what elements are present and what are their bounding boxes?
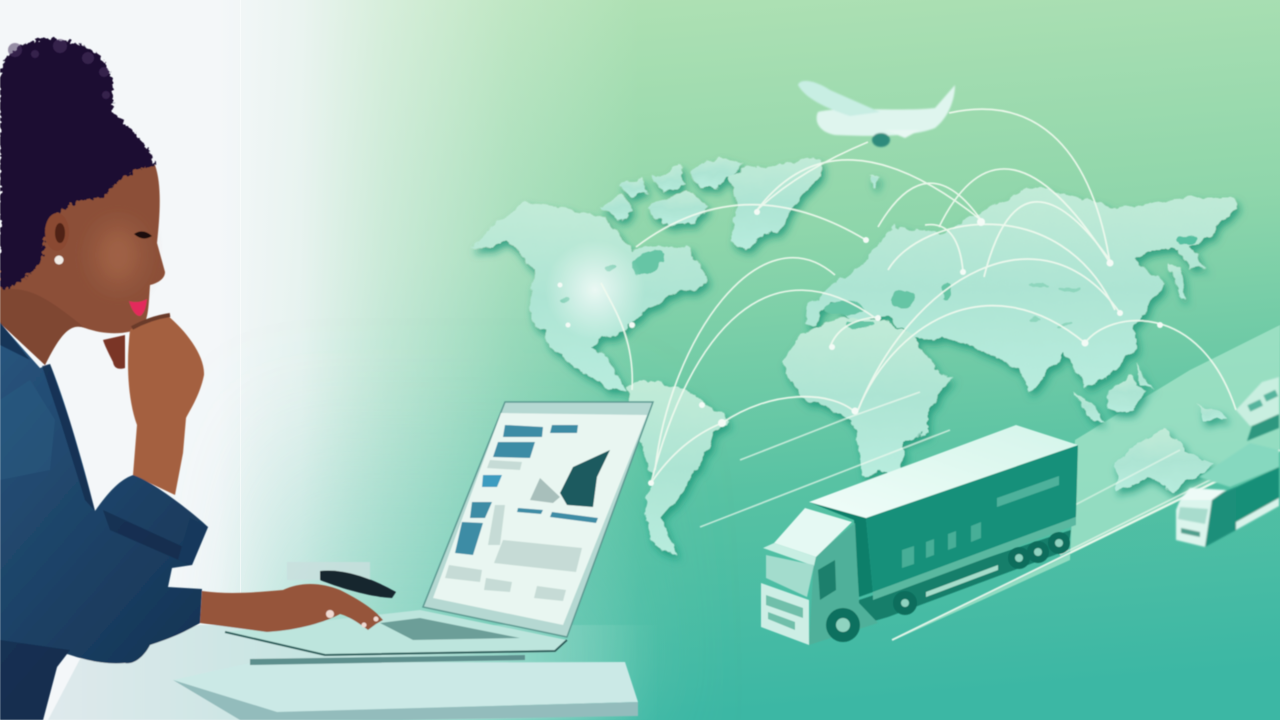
truck cab side [809, 523, 878, 645]
glass on desk [287, 562, 370, 580]
typing forearm [200, 584, 383, 632]
continent: Eurasia [806, 187, 1236, 390]
laptop screen [433, 413, 647, 625]
jacket cuff [178, 518, 208, 565]
ear [45, 213, 69, 251]
small truck cab front [1176, 500, 1212, 547]
ship cargo stack [1236, 377, 1279, 426]
truck windshield [766, 555, 814, 597]
truck undercarriage [850, 530, 1071, 628]
hair [0, 39, 155, 290]
fingernails [326, 610, 378, 628]
neck and face [0, 165, 165, 365]
truck wheels [893, 532, 1070, 615]
truck front grille [761, 583, 809, 645]
continent: North America [470, 203, 707, 390]
small truck side [1230, 467, 1279, 530]
screen text lines [445, 460, 582, 601]
small truck roof [1199, 443, 1279, 487]
truck cab top band [763, 543, 816, 566]
truck side step [926, 565, 998, 597]
continent: Greenland [727, 157, 823, 250]
islands: Arctic archipelago [600, 158, 742, 226]
woman [0, 39, 396, 720]
small truck [1176, 443, 1279, 547]
plane wing [798, 81, 880, 116]
earring [54, 256, 64, 264]
ring finger [132, 315, 170, 328]
plane rear wing [885, 130, 920, 138]
eye [134, 231, 152, 239]
paper stack [173, 655, 638, 720]
desk surface [48, 625, 660, 720]
continent: Australia [1116, 430, 1215, 493]
far hand fingers [103, 335, 125, 369]
laptop deck [225, 610, 567, 655]
truck container roof [809, 425, 1078, 518]
islands: Southeast Asia [868, 175, 1225, 420]
truck cab window [818, 560, 836, 600]
truck chassis rail [873, 517, 1076, 600]
small truck grille [1181, 528, 1200, 537]
plane fuselage [817, 85, 955, 136]
airplane [798, 81, 955, 147]
glow over North America [545, 240, 645, 340]
forearm and fist [128, 316, 204, 495]
truck container side [866, 445, 1078, 592]
plane engine [872, 133, 890, 147]
laptop [225, 402, 653, 655]
face highlight [96, 225, 140, 285]
hair puff texture [8, 39, 110, 99]
continent: South America [626, 380, 732, 557]
cargo ship [1236, 377, 1279, 441]
pen [320, 571, 396, 598]
route hubs [558, 209, 1163, 486]
jacket highlight [0, 380, 55, 480]
jacket shadow folds [0, 322, 190, 720]
small truck cab side [1205, 487, 1236, 547]
laptop deck underside edge [225, 632, 567, 655]
ship containers [1247, 390, 1278, 412]
small truck cab roof [1180, 488, 1226, 500]
world map [470, 157, 1236, 557]
truck cab roof [774, 508, 852, 557]
truck front wheel [826, 608, 860, 642]
route arcs [601, 109, 1280, 640]
laptop keyboard [380, 618, 520, 640]
seas cut from map [561, 235, 1196, 329]
continent: Africa [782, 317, 954, 475]
neck shadow [0, 289, 85, 365]
ship hull [1247, 414, 1279, 441]
lips [129, 299, 147, 316]
big truck [761, 425, 1078, 645]
small truck lettering band [1236, 498, 1279, 530]
truck side panel marks [902, 476, 1059, 568]
laptop lid [423, 402, 653, 637]
truck container rear of cab [809, 502, 873, 597]
small truck windshield [1178, 507, 1208, 524]
screen blocks [455, 425, 598, 555]
road band [890, 325, 1280, 642]
screen chart image [560, 450, 610, 507]
jacket [0, 323, 208, 720]
